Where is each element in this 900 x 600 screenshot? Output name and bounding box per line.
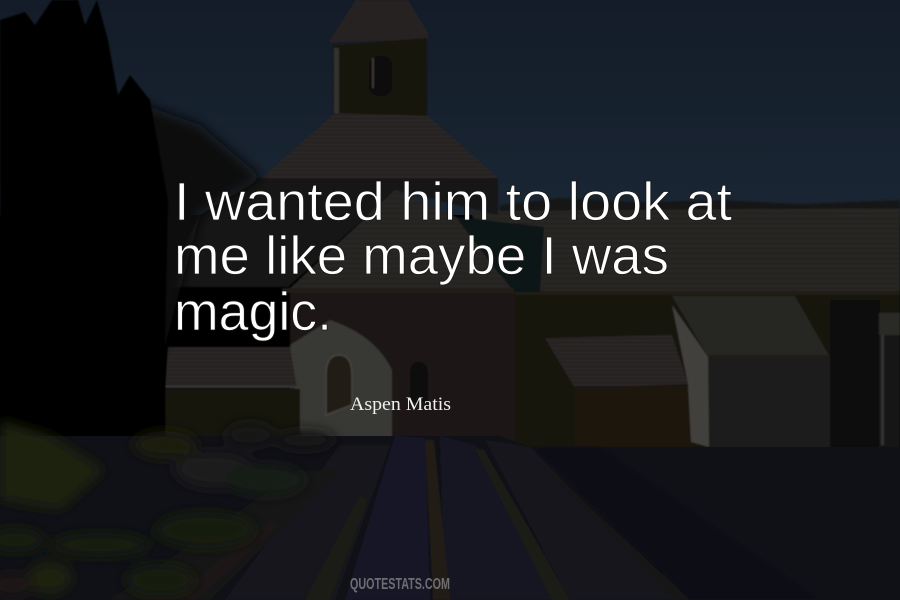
left low wall <box>165 389 300 439</box>
tower window <box>369 56 392 96</box>
main wall <box>290 293 515 445</box>
author: Aspen Matis <box>350 394 451 415</box>
background: distant tree line <box>500 198 900 225</box>
arched window right <box>410 362 428 402</box>
lavender rows <box>110 436 820 600</box>
quote text <box>174 172 732 342</box>
dark cypress trees <box>0 0 168 470</box>
central low roof <box>545 335 688 388</box>
foreground grass and shrubs <box>0 420 335 597</box>
watermark: QUOTESTATS.COM <box>350 576 450 593</box>
octagonal roof <box>262 113 498 178</box>
right building roof <box>672 296 830 357</box>
lantern tower body <box>333 38 427 120</box>
central low wall <box>575 386 690 448</box>
right building wall <box>708 358 830 448</box>
quote text: magic. <box>174 282 332 342</box>
long nave roof <box>470 208 900 295</box>
arched window left <box>326 355 352 415</box>
drum below the roof <box>160 178 498 287</box>
pale apse wall <box>290 320 392 445</box>
lavender field <box>0 436 900 600</box>
left low roof <box>165 347 297 388</box>
quote text: I wanted him to look at <box>174 172 732 232</box>
background: sky <box>0 0 900 215</box>
lantern tower roof <box>329 0 428 42</box>
central dark wall <box>456 217 544 292</box>
quote text: me like maybe I was <box>174 226 669 286</box>
wall right of the crossing <box>515 295 900 450</box>
hill behind trees <box>130 100 262 345</box>
cone roof <box>288 190 514 293</box>
abbey building <box>160 0 900 450</box>
pale gable corner <box>672 305 709 447</box>
far right wall <box>830 300 880 448</box>
dirt paths <box>425 440 450 600</box>
far right building <box>879 313 900 448</box>
